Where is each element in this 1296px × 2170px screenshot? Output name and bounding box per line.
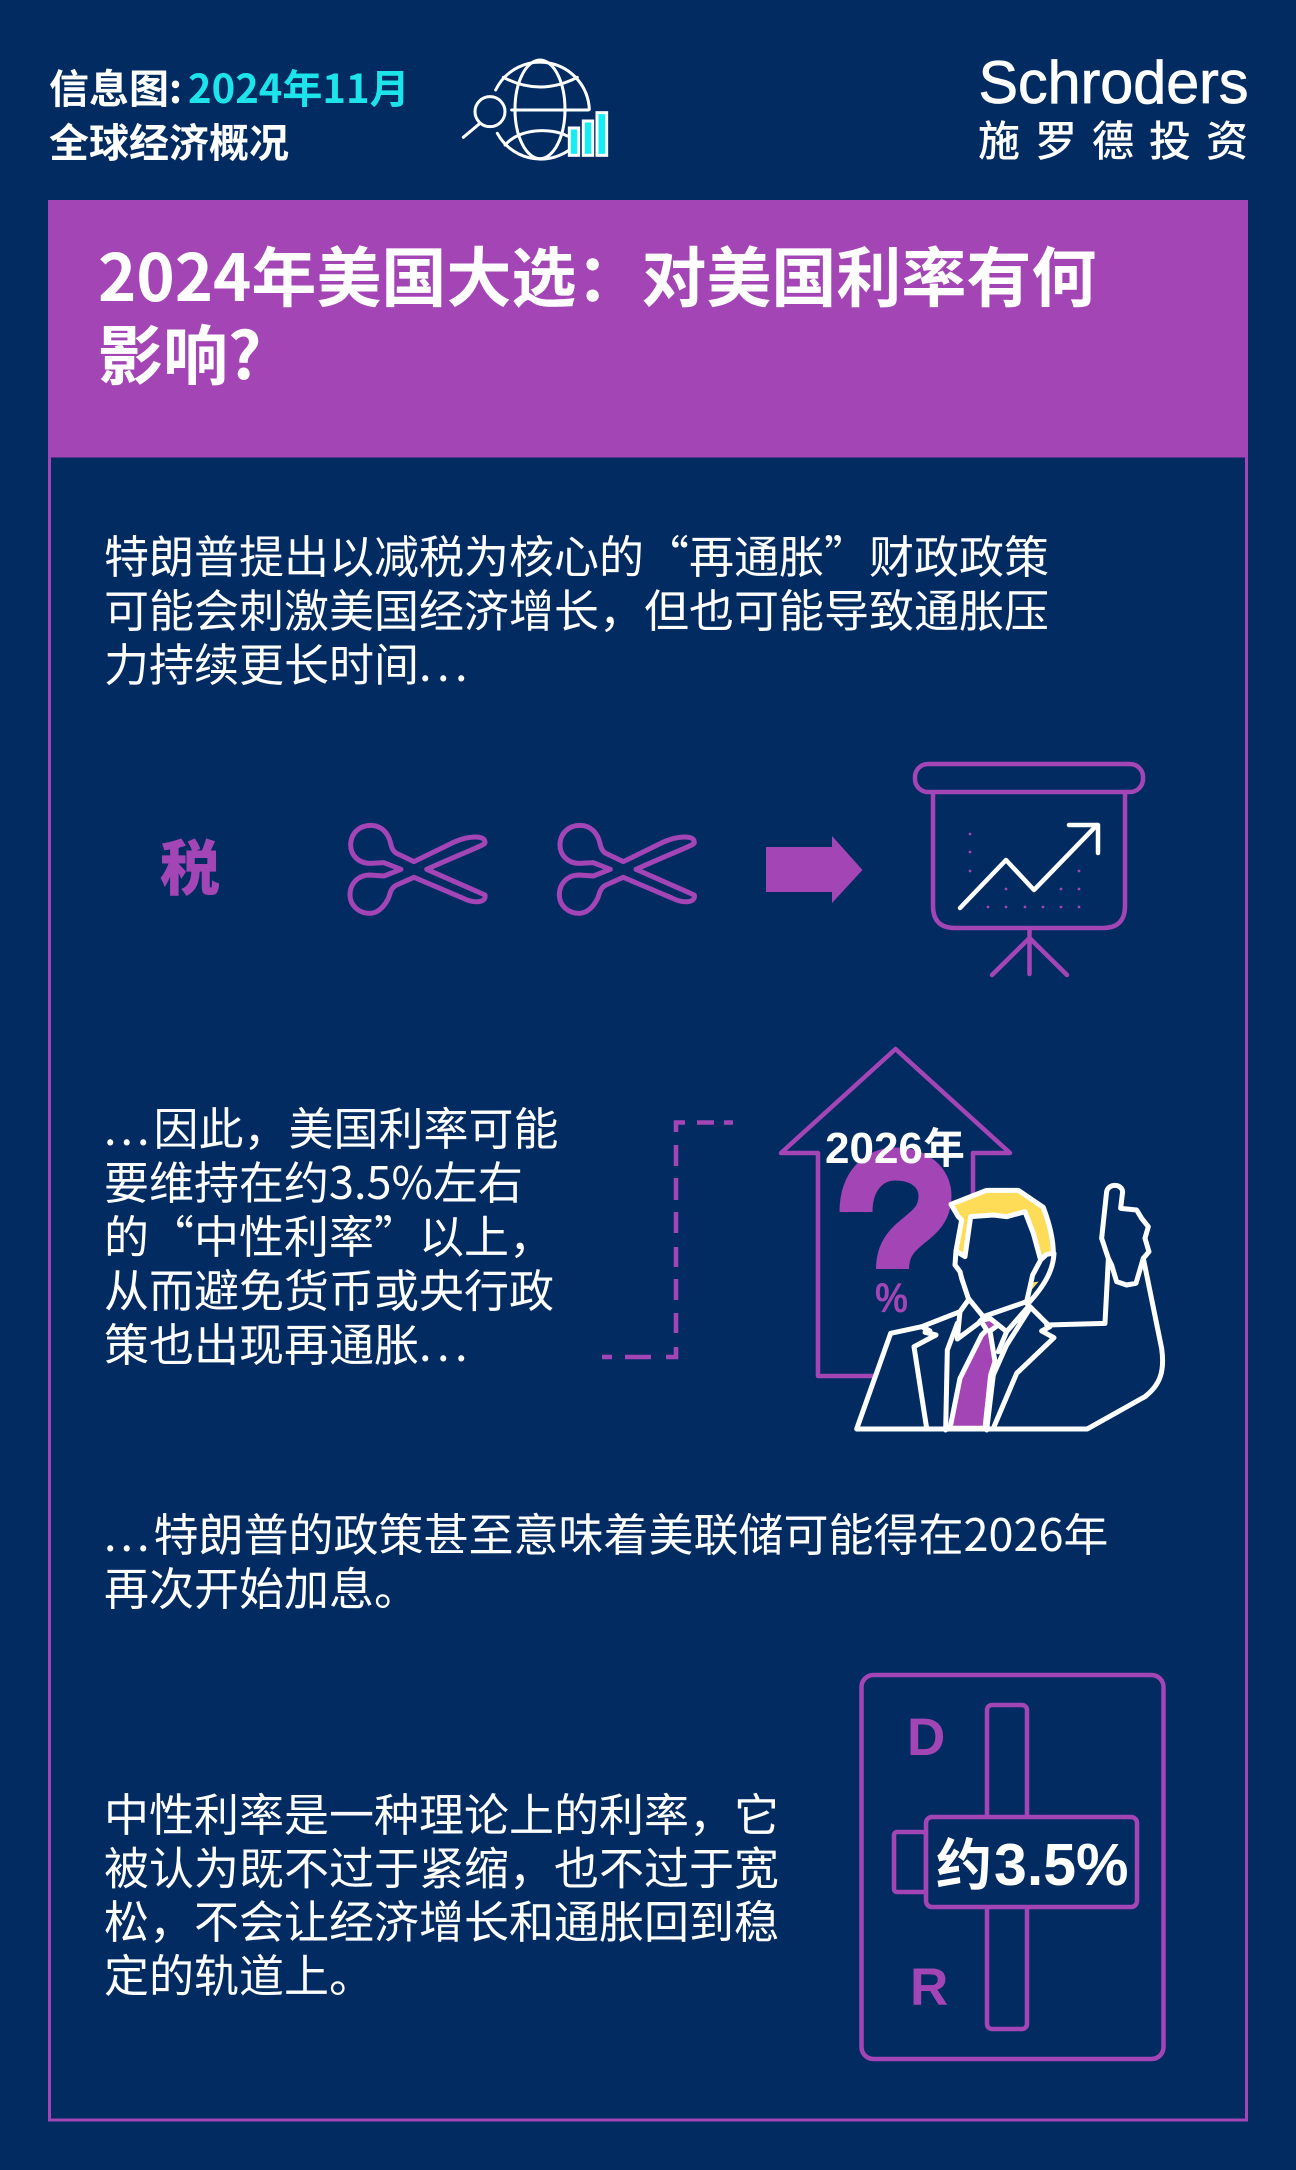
chart: D-R gear selector: R bbox=[910, 1958, 948, 2017]
icon: up arrow with question mark: 2026年 bbox=[825, 1115, 965, 1176]
text block: neutral rate claim: 的“中性利率”以上， bbox=[104, 1201, 554, 1266]
icon: presentation board with rising chart bbox=[915, 764, 1143, 975]
dashed connector bbox=[602, 1122, 733, 1357]
text block: neutral rate claim: ...因此，美国利率可能 bbox=[104, 1093, 559, 1158]
title banner: 2024年美国大选：对美国利率有何 bbox=[98, 226, 1096, 320]
logo: Schroders: 施罗德投资 bbox=[978, 108, 1248, 169]
text block: intro: 特朗普提出以减税为核心的“再通胀”财政政策 bbox=[104, 521, 1049, 586]
arrow: right bbox=[766, 836, 862, 903]
text block: neutral rate claim: 要维持在约3.5%左右 bbox=[104, 1147, 523, 1212]
panel frame bbox=[50, 456, 1246, 2120]
chart: D-R gear selector: 约3.5% bbox=[936, 1821, 1128, 1902]
icon: tax character: 税 bbox=[160, 821, 220, 908]
text block: intro: 可能会刺激美国经济增长，但也可能导致通胀压 bbox=[104, 575, 1049, 640]
text block: rate hike: 再次开始加息。 bbox=[104, 1553, 419, 1618]
chart: D-R gear selector: D bbox=[907, 1708, 945, 1767]
text block: intro bbox=[104, 521, 1049, 694]
text block: neutral rate claim bbox=[104, 1093, 559, 1374]
icon: scissors pair bbox=[350, 825, 694, 913]
text block: rate hike bbox=[104, 1499, 1108, 1618]
icon: up arrow with question mark bbox=[781, 1049, 1010, 1376]
title banner: 影响? bbox=[98, 304, 261, 398]
header label bbox=[49, 57, 410, 169]
illustration: man in suit with thumbs up bbox=[857, 1185, 1163, 1430]
text block: rate hike: ...特朗普的政策甚至意味着美联储可能得在2026年 bbox=[104, 1499, 1108, 1564]
icon: globe with magnifier and bars bbox=[463, 60, 607, 159]
text block: neutral rate definition: 松，不会让经济增长和通胀回到稳 bbox=[104, 1886, 779, 1951]
text block: neutral rate claim: 策也出现再通胀... bbox=[104, 1309, 473, 1374]
logo: Schroders: Schroders bbox=[978, 49, 1248, 116]
icon: up arrow with question mark: % bbox=[875, 1274, 908, 1321]
header label: 信息图:2024年11月 bbox=[49, 57, 410, 115]
text block: neutral rate definition: 中性利率是一种理论上的利率，它 bbox=[104, 1779, 779, 1844]
text block: neutral rate claim: 从而避免货币或央行政 bbox=[104, 1255, 554, 1320]
text block: neutral rate definition bbox=[104, 1779, 779, 2005]
text block: neutral rate definition: 定的轨道上。 bbox=[104, 1940, 374, 2005]
text block: neutral rate definition: 被认为既不过于紧缩，也不过于宽 bbox=[104, 1832, 779, 1898]
header label: 全球经济概况 bbox=[49, 111, 289, 169]
chart: D-R gear selector bbox=[862, 1675, 1164, 2059]
text block: intro: 力持续更长时间... bbox=[104, 629, 473, 694]
logo: Schroders bbox=[978, 49, 1248, 169]
title banner bbox=[48, 200, 1248, 456]
